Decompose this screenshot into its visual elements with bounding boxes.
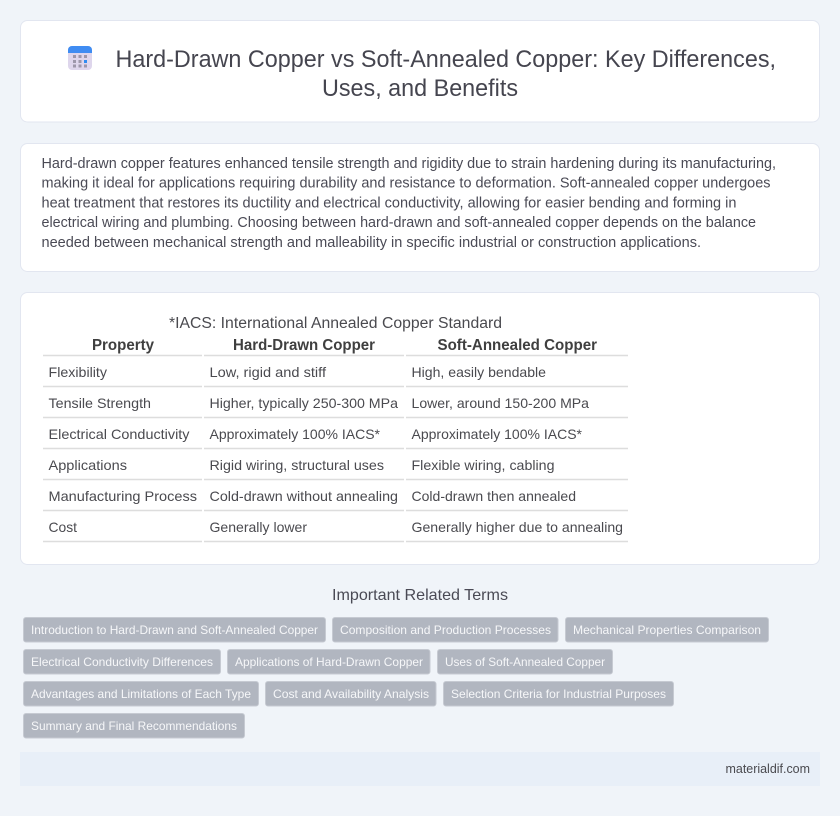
- related terms tags: Applications of Hard-Drawn Copper: [235, 655, 423, 669]
- table caption: *IACS: International Annealed Copper Standard: [169, 315, 502, 332]
- text block: description paragraph: Hard-drawn copper features enhanced tensile strength and rigidity due to strain hardening during its manufacturing,: [42, 156, 776, 172]
- table header: [92, 337, 597, 354]
- row: manufacturing process: Manufacturing Process: [48, 488, 197, 504]
- row: cost: Generally higher due to annealing: [412, 519, 623, 535]
- icon: calendar: [68, 46, 92, 70]
- title: [116, 46, 776, 102]
- title: Uses, and Benefits: [322, 75, 518, 102]
- text block: description paragraph: needed between mechanical strength and malleability in specific industrial or construction applications.: [42, 235, 701, 251]
- table header: Hard-Drawn Copper: [233, 337, 375, 354]
- row: cost: [48, 519, 623, 535]
- row: electrical conductivity: Approximately 100% IACS*: [412, 426, 583, 442]
- header panel: [20, 20, 820, 122]
- related terms tags: Summary and Final Recommendations: [31, 719, 237, 733]
- related terms tags: Uses of Soft-Annealed Copper: [445, 655, 605, 669]
- row: cost: Generally lower: [210, 519, 307, 535]
- table header: Property: [92, 337, 154, 354]
- related terms tags: Cost and Availability Analysis: [273, 687, 429, 701]
- row: applications: Applications: [48, 457, 127, 473]
- related terms tags: [24, 618, 768, 738]
- row: flexibility: Low, rigid and stiff: [210, 364, 326, 380]
- row: cost: Cost: [48, 519, 77, 535]
- related terms tags: Composition and Production Processes: [340, 623, 551, 637]
- panel: comparison table: [20, 292, 820, 564]
- row: flexibility: [48, 364, 546, 380]
- related terms tags: Mechanical Properties Comparison: [573, 623, 761, 637]
- row: flexibility: High, easily bendable: [412, 364, 546, 380]
- row: applications: [48, 457, 554, 473]
- related terms tags: Introduction to Hard-Drawn and Soft-Annealed Copper: [31, 623, 318, 637]
- text block: description paragraph: making it ideal for applications requiring durability and resistance to deformation. Soft-annealed copper undergoes: [42, 176, 770, 192]
- row: manufacturing process: Cold-drawn without annealing: [210, 488, 398, 504]
- row: electrical conductivity: Approximately 100% IACS*: [210, 426, 381, 442]
- row: electrical conductivity: Electrical Conductivity: [48, 426, 190, 442]
- table header: Soft-Annealed Copper: [438, 337, 597, 354]
- footer: [20, 752, 820, 786]
- row: applications: Flexible wiring, cabling: [412, 457, 554, 473]
- related terms tags: Advantages and Limitations of Each Type: [31, 687, 251, 701]
- row: tensile strength: Tensile Strength: [48, 395, 151, 411]
- text block: description paragraph: electrical wiring and plumbing. Choosing between hard-drawn and soft-annealed copper depends on the balance: [42, 215, 756, 231]
- row: tensile strength: [48, 395, 589, 411]
- heading: important related terms: Important Related Terms: [332, 587, 508, 604]
- row: tensile strength: Lower, around 150-200 MPa: [412, 395, 589, 411]
- text block: description paragraph: heat treatment that restores its ductility and electrical conductivity, allowing for easier bending and forming in: [42, 196, 736, 212]
- row: applications: Rigid wiring, structural uses: [210, 457, 384, 473]
- related terms tags: Selection Criteria for Industrial Purposes: [451, 687, 666, 701]
- row: manufacturing process: Cold-drawn then annealed: [412, 488, 576, 504]
- title: Hard-Drawn Copper vs Soft-Annealed Copper: Key Differences,: [116, 46, 776, 73]
- row: tensile strength: Higher, typically 250-300 MPa: [210, 395, 398, 411]
- row: electrical conductivity: [48, 426, 583, 442]
- related terms tags: Electrical Conductivity Differences: [31, 655, 213, 669]
- text block: description paragraph: [42, 156, 776, 251]
- row: flexibility: Flexibility: [48, 364, 107, 380]
- footer: materialdif.com: [726, 762, 810, 776]
- panel: description: [20, 144, 820, 272]
- row: manufacturing process: [48, 488, 576, 504]
